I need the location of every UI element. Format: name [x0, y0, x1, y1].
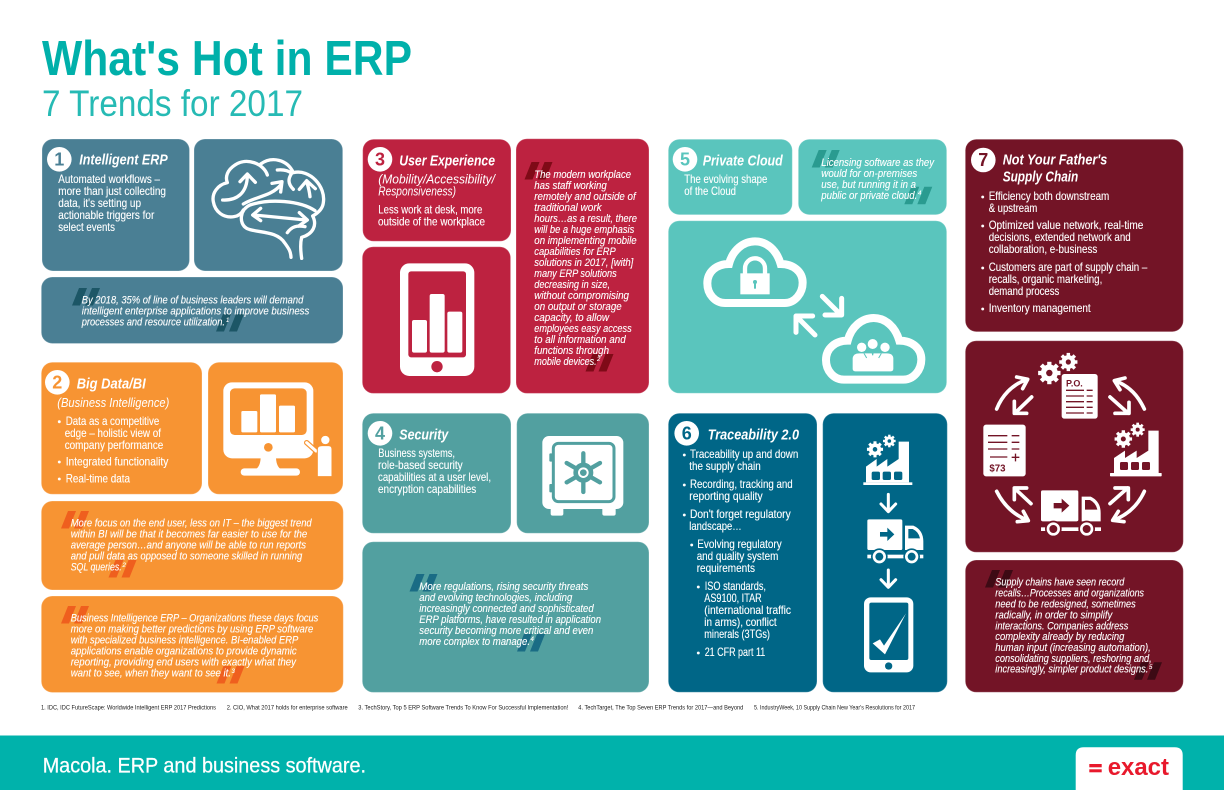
closing quote mark	[517, 634, 545, 652]
heading: User Experience: User Experience	[399, 153, 495, 170]
quote text: want to see, when they want to see it.	[71, 668, 231, 680]
footnotes: 5. IndustryWeek, 10 Supply Chain New Year's Resolutions for 2017	[754, 705, 915, 712]
bullet list: (international traffic	[704, 604, 791, 617]
quote text: 3	[232, 669, 236, 675]
quote text: SQL queries.	[71, 561, 122, 573]
text: private cloud description: The evolving shape	[684, 173, 767, 186]
closing quote mark	[108, 560, 136, 578]
bullet list: Recording, tracking and	[690, 478, 793, 491]
text: user experience description: outside of the workplace	[378, 216, 485, 229]
panel: 7 supply chain	[965, 139, 1183, 332]
quote text: ERP platforms, have resulted in application	[419, 614, 601, 626]
text: intelligent ERP description: more than just collecting	[58, 185, 166, 198]
quote text	[419, 581, 601, 648]
quote text: has staff working	[534, 180, 607, 192]
quote text: to all information and	[534, 334, 626, 346]
opening quote mark	[72, 288, 100, 306]
quote text: 5	[1149, 665, 1153, 671]
quote text: use, but running it in a	[821, 179, 916, 191]
opening quote mark	[812, 150, 840, 168]
icon: factory	[1110, 423, 1162, 476]
quote text: solutions in 2017, [with]	[534, 257, 634, 269]
bullet list: Traceability up and down	[690, 448, 798, 461]
bullet list: Data as a competitive	[66, 415, 159, 428]
icon: safe	[542, 436, 623, 516]
quote text: will be a huge emphasis	[534, 224, 635, 236]
bullet list: in arms), conflict	[704, 616, 777, 629]
panel: quote supply chain	[965, 560, 1183, 692]
bullet list	[981, 190, 1148, 315]
closing quote mark	[904, 187, 932, 204]
quote text: more complex to manage.	[419, 636, 530, 648]
quote text: need to be redesigned, sometimes	[995, 598, 1136, 610]
quote text	[995, 576, 1153, 676]
closing quote mark	[1134, 662, 1162, 680]
quote text: hours…as a result, there	[534, 213, 637, 225]
quote text: complexity already by reducing	[995, 631, 1125, 643]
text: security description: capabilities at a user level,	[378, 471, 491, 484]
icon: truck	[1041, 490, 1101, 537]
quote text: increasingly, simpler product designs.	[995, 664, 1148, 676]
opening quote mark	[61, 511, 89, 528]
heading: Not Your Father's Supply Chain: Supply Chain	[1003, 169, 1078, 186]
quote text: and evolving technologies, including	[419, 592, 573, 604]
quote text	[81, 295, 310, 329]
quote text: many ERP solutions	[534, 268, 617, 280]
heading: Not Your Father's Supply Chain: Not Your Father's	[1003, 151, 1107, 168]
icon: invoice: $73	[989, 464, 1006, 475]
text: security description	[378, 447, 491, 496]
icon: cloud with lock	[707, 241, 803, 303]
quote text: recalls…Processes and organizations	[995, 587, 1144, 599]
quote text: more on making better predictions by using ERP software	[71, 624, 313, 636]
quote text: public or private cloud.	[820, 190, 917, 202]
text: security description: Business systems,	[378, 447, 455, 460]
number badge 4	[368, 421, 392, 446]
closing quote mark	[216, 314, 244, 332]
quote text: average person…and anyone will be able to run reports	[71, 539, 306, 551]
heading: Intelligent ERP: Intelligent ERP	[79, 152, 169, 169]
quote text: Business Intelligence ERP – Organizations these days focus	[71, 613, 319, 625]
quote text: traditional work	[534, 202, 603, 214]
icon: phone with check mark	[864, 597, 913, 672]
footer slogan: Macola. ERP and business software.	[43, 754, 366, 777]
icon: purchase order: P.O.	[1066, 379, 1083, 389]
quote text: mobile devices.	[534, 356, 597, 368]
text: user experience description: Less work at desk, more	[378, 204, 482, 217]
bullet list: minerals (3TGs)	[704, 628, 770, 641]
panel: quote 1	[41, 277, 343, 344]
quote text: employees easy access	[534, 323, 632, 335]
footnotes: 2. CIO, What 2017 holds for enterprise software	[227, 705, 348, 712]
bullet list: Inventory management	[989, 302, 1091, 315]
number badge 1	[47, 147, 72, 172]
bullet list: & upstream	[989, 202, 1037, 215]
bullet list: Customers are part of supply chain –	[989, 261, 1148, 274]
number badge 7	[971, 148, 996, 172]
quote text: decreasing in size,	[534, 279, 610, 291]
footnotes: 4. TechTarget, The Top Seven ERP Trends for 2017—and Beyond	[578, 705, 744, 712]
text: intelligent ERP description: select events	[58, 221, 115, 234]
footnotes: 3. TechStory, Top 5 ERP Software Trends To Know For Successful Implementation!	[358, 705, 569, 712]
quote text: 1	[226, 318, 229, 324]
quote text: 4	[530, 637, 534, 643]
heading: Traceability 2.0: Traceability 2.0	[708, 427, 800, 444]
heading: Big Data/BI: Big Data/BI	[77, 375, 146, 392]
bullet list: Efficiency both downstream	[989, 190, 1109, 203]
quote text: on implementing mobile	[534, 235, 637, 247]
text: private cloud description	[684, 173, 767, 198]
quote text	[820, 157, 935, 202]
title: What's Hot in ERP	[42, 32, 412, 86]
text: security description: role-based security	[378, 459, 463, 472]
bullet list: the supply chain	[689, 460, 761, 473]
footer band	[0, 736, 1224, 790]
icon: factory	[863, 435, 912, 485]
number badge 1: 1	[54, 150, 64, 170]
text: private cloud description: of the Cloud	[684, 185, 736, 198]
number badge 3	[368, 147, 392, 172]
icon: gears	[1038, 353, 1077, 384]
closing quote mark	[216, 666, 244, 684]
text: security description: encryption capabilities	[378, 483, 476, 496]
opening quote mark	[410, 574, 438, 592]
panel: 4 security	[362, 413, 511, 533]
panel: quote 3	[41, 596, 343, 692]
bullet list: requirements	[697, 562, 755, 575]
panel: 5 private cloud	[668, 139, 792, 215]
panel: brain icon	[194, 139, 343, 271]
panel: supply chain cycle	[965, 341, 1183, 552]
number badge 3: 3	[375, 150, 385, 170]
bullet list: decisions, extended network and	[989, 231, 1131, 244]
quote text: The modern workplace	[534, 169, 631, 181]
panel: 1 intelligent ERP	[42, 139, 190, 271]
quote text: on output or storage	[534, 301, 622, 313]
subheading: Responsiveness)	[378, 185, 456, 199]
quote text: 2	[122, 563, 126, 569]
bullet list: company performance	[65, 439, 163, 452]
quote text: security becoming more critical and even	[419, 625, 593, 637]
panel: 3 user experience	[363, 139, 511, 241]
quote text: within BI will be that it becomes far easier to use for the	[71, 528, 307, 540]
panel: tablet icon	[362, 247, 511, 393]
bullet list: ISO standards,	[705, 580, 766, 593]
quote text: and pull data as opposed to someone skilled in running	[71, 550, 303, 562]
panel: quote user experience	[516, 139, 649, 393]
quote text: Supply chains have seen record	[995, 576, 1125, 588]
bullet list: Optimized value network, real-time	[989, 219, 1143, 232]
quote text: intelligent enterprise applications to improve business	[82, 306, 310, 318]
bullet list: Evolving regulatory	[697, 538, 782, 551]
bullet list: 21 CFR part 11	[705, 646, 765, 659]
quote text: 2	[596, 357, 601, 363]
arrow: truck to phone	[881, 570, 896, 587]
text: intelligent ERP description: data, it's setting up	[58, 197, 141, 210]
icon: exchange arrows	[796, 296, 842, 335]
quote text: By 2018, 35% of line of business leaders will demand	[82, 295, 304, 307]
logo: exact	[1076, 747, 1183, 790]
bullet list: Real-time data	[66, 473, 130, 486]
quote text: without compromising	[534, 290, 630, 302]
quote text	[534, 169, 637, 368]
panel: monitor icon	[208, 362, 343, 494]
bullet list: AS9100, ITAR	[704, 592, 762, 605]
heading: Not Your Father's Supply Chain	[1003, 151, 1107, 186]
footnotes	[41, 705, 915, 712]
bullet list: demand process	[989, 285, 1059, 298]
heading: Private Cloud: Private Cloud	[703, 153, 783, 170]
quote text: processes and resource utilization.	[81, 317, 225, 329]
quote text: More focus on the end user, less on IT – the biggest trend	[71, 517, 312, 529]
panel: quote 2	[41, 501, 343, 590]
opening quote mark	[985, 570, 1013, 588]
bullet list: landscape…	[689, 520, 742, 533]
number badge 2: 2	[52, 372, 62, 392]
number badge 6	[674, 421, 699, 446]
quote text: capabilities for ERP	[534, 246, 616, 258]
bullet list: reporting quality	[689, 490, 763, 503]
bullet list	[683, 448, 798, 659]
quote text: capacity, to allow	[534, 312, 610, 324]
quote text: increasingly connected and sophisticated	[419, 603, 594, 615]
panel: quote private cloud	[798, 139, 947, 215]
bullet list	[58, 415, 169, 486]
icon: cloud with people	[826, 318, 921, 380]
subtitle: 7 Trends for 2017	[42, 83, 303, 124]
arrows: cycle	[997, 377, 1144, 522]
number badge 7: 7	[978, 150, 988, 170]
quote text: interactions. Companies address	[995, 620, 1129, 632]
quote text: would for on-premises	[821, 168, 918, 180]
heading: Security: Security	[399, 427, 449, 444]
icon: monitor with presenter	[223, 382, 332, 477]
bullet list: edge – holistic view of	[65, 427, 162, 440]
quote text: Licensing software as they	[821, 157, 935, 169]
panel: safe icon	[517, 413, 649, 533]
footnotes: 1. IDC, IDC FutureScape: Worldwide Intelligent ERP 2017 Predictions	[41, 705, 216, 712]
quote text	[71, 517, 312, 573]
number badge 2	[45, 370, 70, 395]
bullet list: collaboration, e-business	[989, 243, 1097, 256]
opening quote mark	[524, 162, 552, 180]
quote text: More regulations, rising security threats	[419, 581, 589, 593]
quote text: consolidating suppliers, reshoring and,	[995, 653, 1152, 665]
bullet list: Integrated functionality	[66, 456, 169, 469]
quote text: reporting, providing end users with exactly what they	[71, 657, 297, 669]
text: intelligent ERP description	[58, 173, 166, 234]
quote text: remotely and outside of	[534, 191, 637, 203]
text: intelligent ERP description: actionable triggers for	[58, 209, 154, 222]
panel: quote security	[362, 542, 649, 692]
arrow: factory to truck	[881, 494, 896, 512]
icon: purchase order	[1062, 374, 1098, 419]
closing quote mark	[586, 354, 614, 372]
number badge 6: 6	[682, 424, 692, 444]
number badge 4: 4	[375, 424, 385, 444]
icon: tablet with bars	[400, 263, 474, 376]
number badge 5: 5	[680, 150, 690, 170]
quote text	[71, 613, 319, 680]
text: intelligent ERP description: Automated workflows –	[58, 173, 160, 186]
subheading: (Mobility/Accessibility/	[378, 172, 496, 186]
panel: clouds illustration	[668, 221, 947, 393]
quote text: functions through	[534, 345, 609, 357]
quote text: applications enable organizations to provide dynamic	[71, 646, 297, 658]
icon: invoice	[983, 425, 1026, 476]
opening quote mark	[61, 606, 89, 624]
bullet list: and quality system	[697, 550, 778, 563]
logo: exact: exact	[1108, 754, 1169, 781]
panel: traceability icons	[823, 413, 947, 692]
quote text: 4	[918, 191, 922, 197]
quote text: human input (increasing automation),	[995, 642, 1151, 654]
quote text: with specialized business intelligence. BI-enabled ERP	[71, 635, 299, 647]
icon: brain	[213, 160, 324, 258]
panel: 6 traceability	[668, 413, 817, 692]
subheading: (Business Intelligence)	[57, 396, 169, 410]
bullet list: recalls, organic marketing,	[989, 273, 1102, 286]
text: user experience description	[378, 204, 485, 229]
bullet list: Don't forget regulatory	[690, 508, 791, 521]
panel: 2 big data	[41, 362, 202, 494]
subheading	[378, 172, 496, 199]
icon: truck	[867, 519, 923, 565]
quote text: radically, in order to simplify	[995, 609, 1113, 621]
